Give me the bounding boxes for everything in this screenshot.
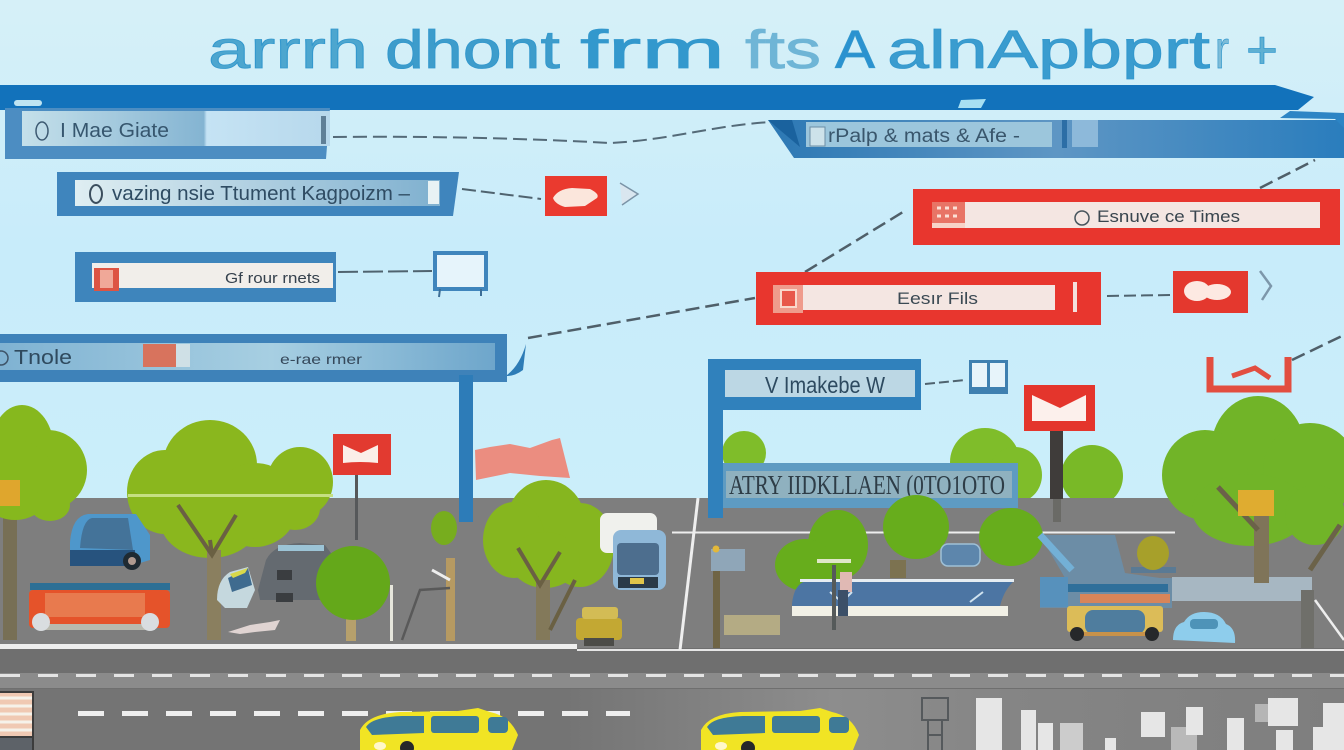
tree: right large: [1162, 396, 1344, 648]
icon: chevron right: [1260, 271, 1271, 300]
dashed connector: red panels: [805, 212, 903, 272]
panel: tnole sign: e-rae rmer: [280, 351, 362, 367]
icon: blue parked car: [941, 544, 980, 566]
yellow and blue street sign frame: [708, 359, 921, 518]
icon: chevron: [620, 183, 638, 205]
small tan panel: [724, 615, 780, 635]
icon: small car: [217, 567, 255, 608]
dashed connector to monitor: [338, 271, 432, 272]
panel: tnole sign: [0, 334, 526, 382]
road: [0, 644, 1344, 750]
panel: image gate: [5, 108, 330, 159]
panel: red files label: [756, 272, 1101, 325]
tree: small oval: [431, 511, 457, 545]
icon: signal tower: [922, 698, 948, 750]
title: fts: [745, 20, 821, 80]
panel: your times label: Gf rour rnets: [225, 270, 320, 287]
icon: yellow taxi left: [360, 708, 518, 750]
blue sign pole: [459, 375, 473, 522]
title: frm: [580, 20, 725, 80]
top blue banner: [0, 85, 1314, 110]
icon: blue bus: [70, 514, 150, 570]
panel: wayfinding label: [57, 172, 459, 216]
tree: dark round: [316, 546, 390, 641]
ground: [0, 498, 1344, 648]
panel: red files label: Eesır Fils: [897, 289, 978, 308]
panel: top right strip: rPalp & mats & Afe -: [828, 126, 1020, 147]
panel: your times label: [75, 252, 336, 302]
title: alnApbprt: [887, 20, 1210, 80]
icon: red cloud badge: [1173, 271, 1248, 313]
title: dhont: [385, 20, 560, 80]
icon: yellow taxi right: [701, 708, 859, 750]
tree: far left: [0, 405, 87, 640]
dashed connector to red cloud icon: [1107, 295, 1170, 296]
icon: blue terminal building: [1040, 535, 1172, 608]
icon: crossing stripes: [0, 691, 34, 750]
person with post: [817, 559, 852, 630]
title: A: [835, 20, 875, 80]
background tree cluster right: [722, 428, 1123, 517]
icon: small window box: [969, 360, 1008, 394]
panel: red times label: [913, 189, 1340, 245]
dashed connector to small box: [925, 380, 965, 384]
title: r: [1215, 20, 1229, 80]
icon: yellow car: [576, 607, 622, 646]
yellow round bush: [1131, 536, 1176, 573]
skyline: [976, 698, 1344, 750]
title: +: [1246, 20, 1278, 80]
icon: monitor: [435, 253, 486, 297]
icon: white bus: [600, 513, 666, 590]
panel: wayfinding label: vazing nsie Ttument Kagpoizm –: [112, 183, 411, 205]
tree group: center right: [775, 495, 1043, 591]
title: arrrh: [208, 20, 368, 80]
yellow and blue street sign frame: V Imakebe W: [765, 372, 885, 398]
lot markings right: [672, 498, 1344, 650]
tree: left large: [127, 420, 333, 640]
icon: red plane badge: [545, 176, 607, 216]
dashed connector: sign to files panel: [528, 298, 755, 338]
icon: light blue car: [1173, 612, 1235, 643]
billboard: [723, 463, 1018, 508]
icon: broken red frame: [1210, 357, 1288, 389]
sky background: [0, 0, 1344, 500]
dashed connector: strip to red panel: [1260, 160, 1315, 188]
icon: red mail sign left: [333, 434, 391, 540]
road arrow markings: [228, 620, 280, 634]
dashed connector to red icon: [462, 189, 541, 199]
post with bars: [390, 558, 455, 641]
icon: torn pink sign: [475, 438, 570, 480]
icon: red mail sign right: [1024, 385, 1095, 522]
panel: top right strip: [768, 111, 1344, 158]
tree: center: [483, 480, 614, 640]
right data strip: [1172, 577, 1312, 601]
lamp post and sign: [711, 546, 745, 648]
icon: blue train: [792, 579, 1014, 616]
dashed connector: gate to top strip: [333, 122, 770, 143]
billboard: ATRY IIDKLLAEN (0TO1OTO: [729, 470, 1005, 500]
panel: red times label: Esnuve ce Times: [1097, 207, 1240, 226]
dashed connector: frame to edge: [1292, 335, 1344, 360]
panel: image gate: I Mae Giate: [60, 120, 169, 142]
icon: red bus: [29, 583, 170, 631]
title: [208, 20, 1278, 80]
panel: tnole sign: Tnole: [14, 347, 72, 369]
icon: yellow bus: [1067, 606, 1163, 641]
icon: gray car: [258, 543, 336, 602]
